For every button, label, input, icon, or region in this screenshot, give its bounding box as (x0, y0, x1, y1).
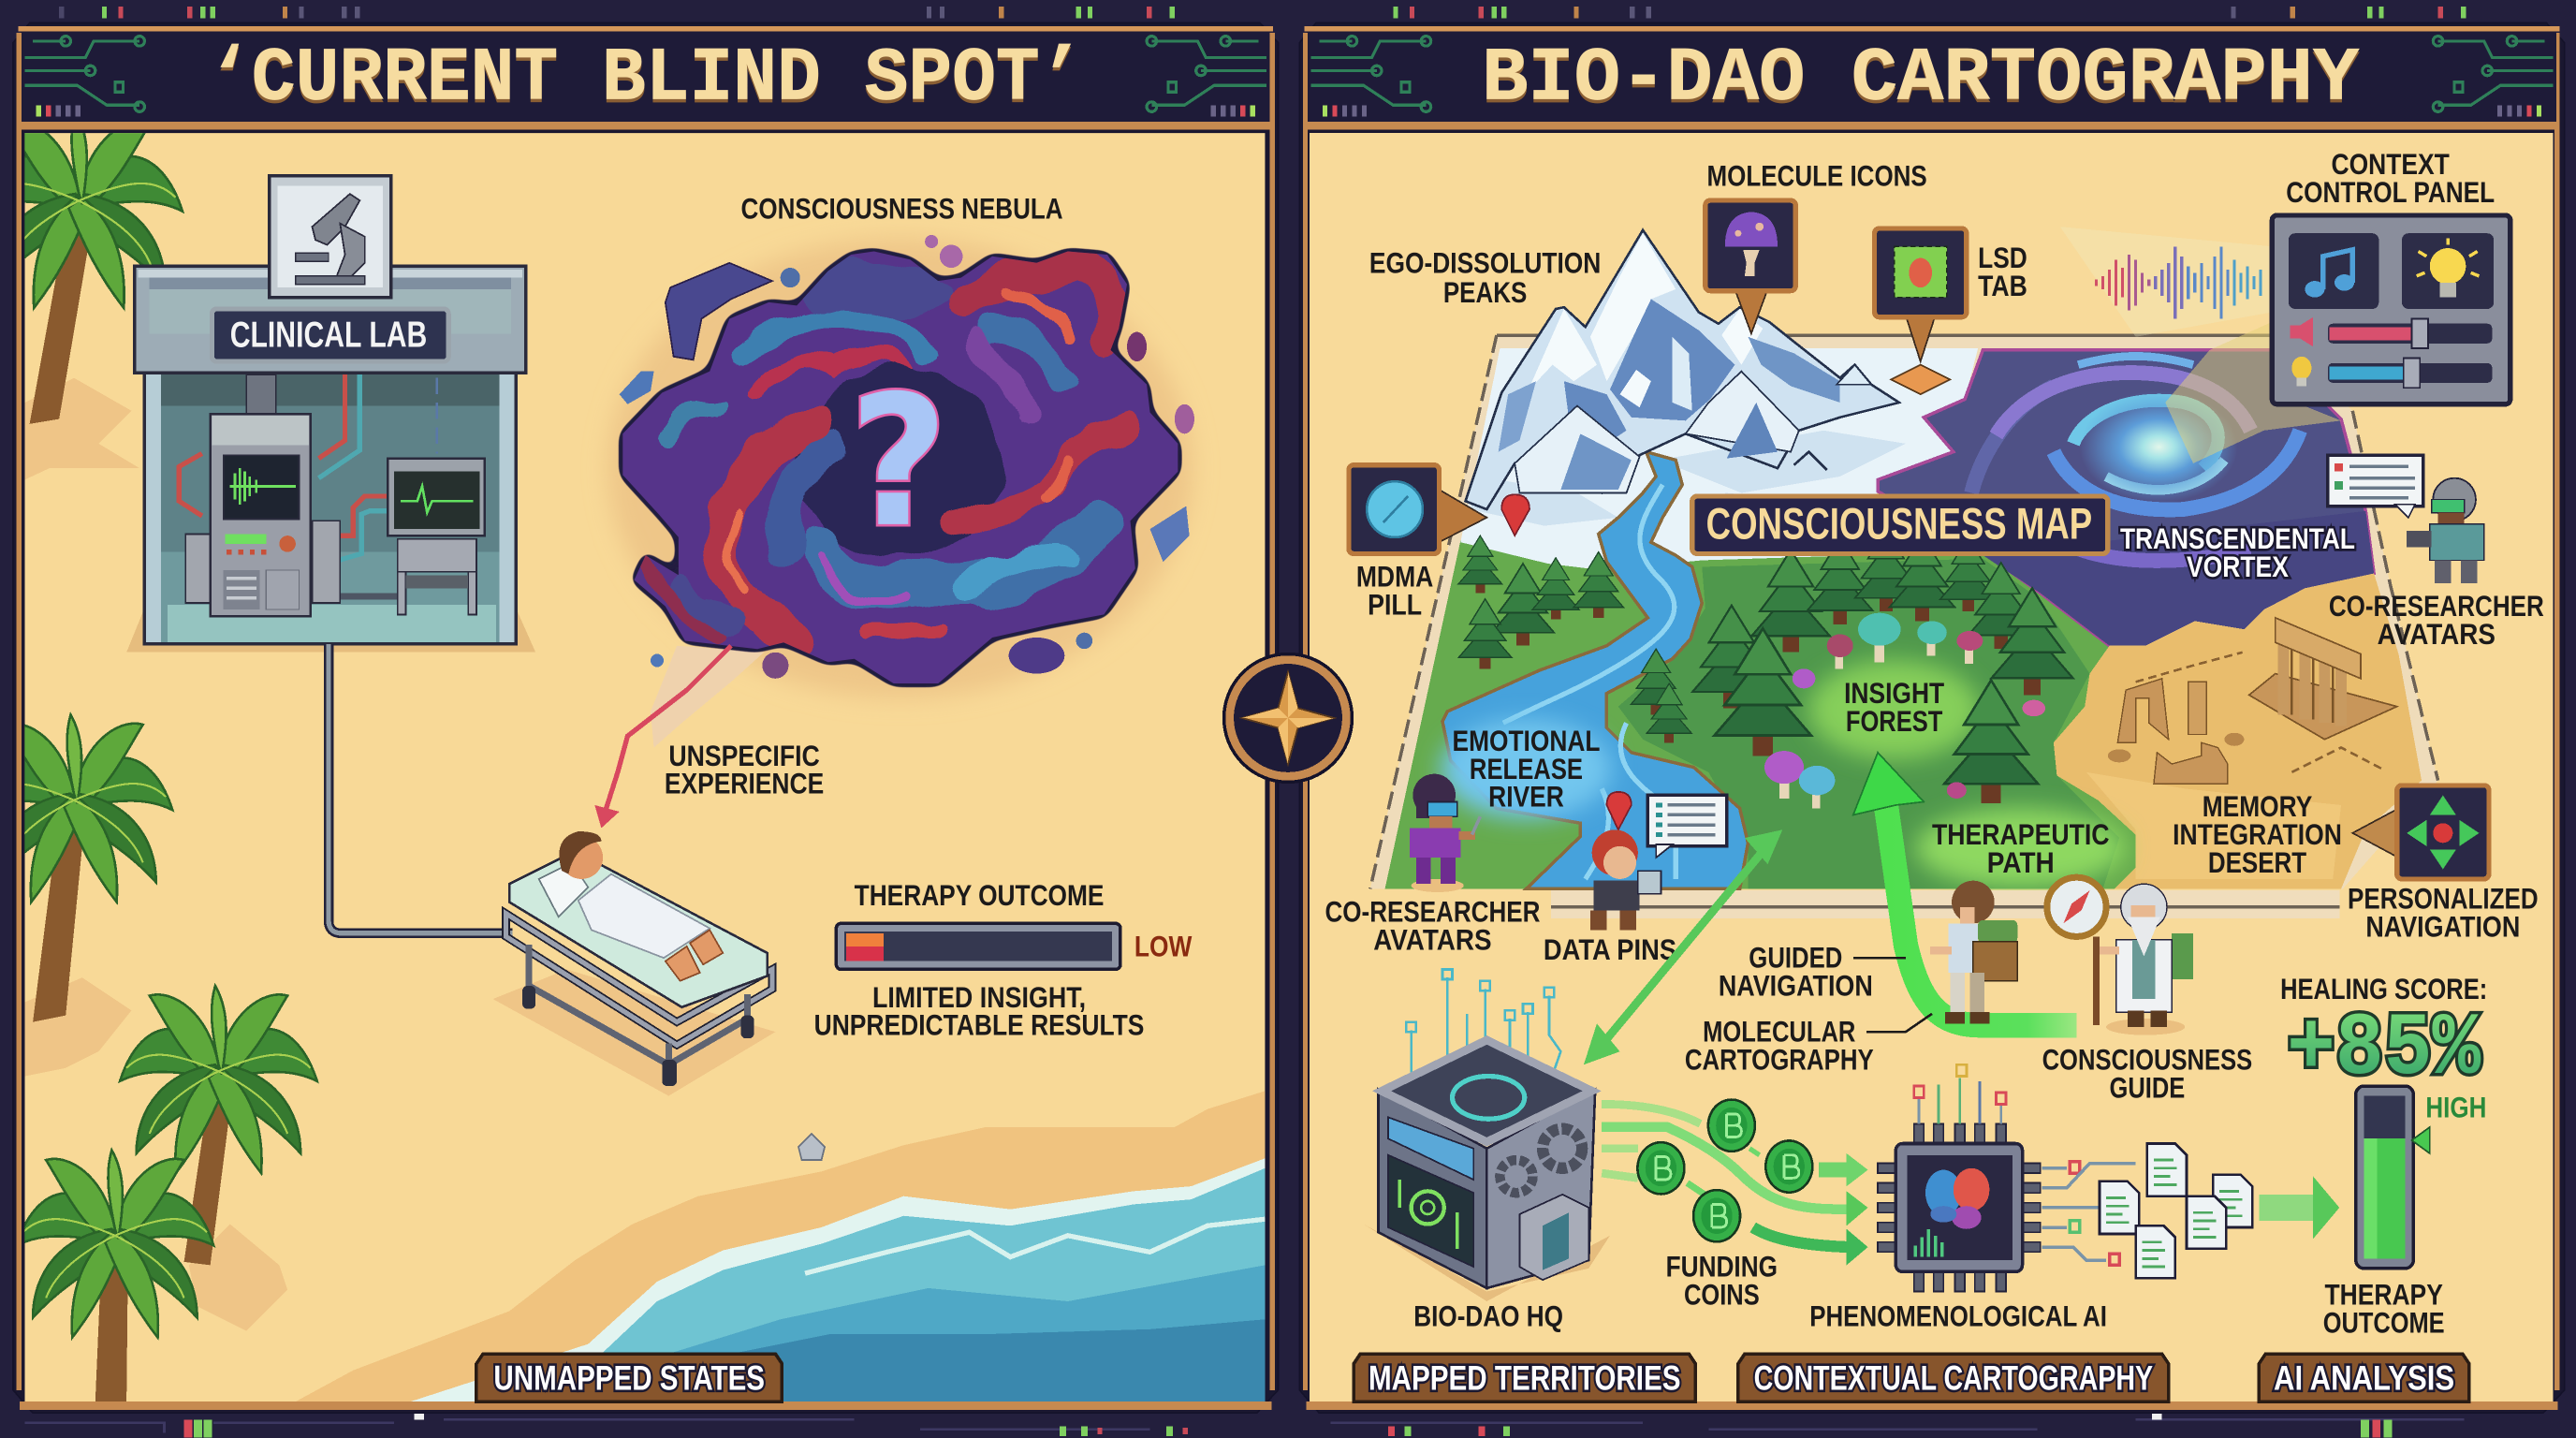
map pin (1501, 494, 1530, 536)
therapy outcome label right (2323, 1277, 2445, 1339)
co-researcher label top right: AVATARS (2378, 617, 2496, 651)
therapy outcome label: THERAPY OUTCOME (855, 878, 1104, 912)
icon: central compass (1224, 654, 1352, 782)
header bar right (1306, 31, 2558, 130)
vortex lower tone (1983, 511, 2374, 646)
funding flows (1602, 1104, 1848, 1247)
funding coins label: COINS (1684, 1277, 1760, 1311)
nebula plume (651, 646, 764, 748)
ego-dissolution label (1369, 245, 1601, 309)
river highlight (1503, 485, 1717, 879)
map top edge (1497, 334, 2272, 336)
brain (1925, 1168, 1989, 1229)
gears (1500, 1129, 1582, 1193)
emotional release river label: RIVER (1488, 780, 1564, 814)
tab: unmapped states: UNMAPPED STATES (493, 1359, 765, 1398)
therapy outcome low: UNPREDICTABLE RESULTS (814, 1008, 1144, 1042)
foam lines (805, 1219, 1265, 1273)
co-researcher label left: AVATARS (1373, 922, 1492, 956)
insight forest label (1844, 676, 1944, 738)
mdma pill label: PILL (1368, 587, 1422, 621)
lab roof (135, 266, 526, 373)
gurney frame (506, 914, 772, 1068)
sound beam (2060, 227, 2272, 337)
foam (411, 1158, 1265, 1401)
right peak (1721, 309, 1763, 365)
mushrooms (1764, 613, 2045, 808)
light button (2402, 233, 2494, 309)
lsd tab marker (1891, 365, 1950, 394)
right wall (1486, 1090, 1595, 1288)
palm 3 (120, 986, 317, 1265)
music button (2289, 233, 2378, 309)
mid peak (1686, 372, 1799, 452)
main machine (185, 414, 340, 616)
mdma pill icon (1349, 465, 1486, 553)
chip signal wires (1914, 1064, 2006, 1123)
circuit screen (1388, 1155, 1473, 1267)
tab: mapped territories (1354, 1354, 1695, 1401)
title: bio-dao cartography: BIO-DAO CARTOGRAPHY (1482, 37, 2360, 122)
chip pins (1878, 1123, 2041, 1291)
healing score label: HEALING SCORE: (2280, 972, 2487, 1005)
guided navigation label (1719, 941, 1906, 1003)
icon: mushroom molecule (1705, 200, 1795, 333)
personalized navigation label: NAVIGATION (2365, 909, 2520, 943)
lab wall upper band (161, 374, 500, 405)
consciousness map title (1692, 496, 2108, 553)
circuit decoration right of left header (1147, 37, 1266, 117)
desert (2054, 574, 2422, 888)
pillow (539, 862, 588, 917)
sound slider (2291, 317, 2492, 348)
palm shadow (24, 378, 139, 479)
speech bubble (2328, 455, 2423, 518)
molecule icons label: MOLECULE ICONS (1707, 158, 1927, 192)
gurney shadow (493, 969, 775, 1096)
unspecific experience label: UNSPECIFIC (668, 739, 820, 772)
patient on gurney (493, 831, 775, 1096)
high label: HIGH (2425, 1090, 2486, 1123)
ego-dissolution label: EGO-DISSOLUTION (1369, 245, 1601, 279)
consciousness guide label: CONSCIOUSNESS (2042, 1043, 2252, 1077)
lsd tab label (1978, 241, 2027, 302)
feet (666, 930, 723, 981)
therapy outcome high bar (2356, 1086, 2413, 1269)
side monitor (388, 459, 485, 614)
desert ruins (2108, 618, 2397, 784)
nebula swirls (622, 251, 1178, 683)
ego-dissolution label: PEAKS (1443, 275, 1527, 309)
consciousness nebula label: CONSCIOUSNESS NEBULA (741, 191, 1063, 225)
palm shadow third (189, 1224, 287, 1331)
data speech bubble (1647, 795, 1727, 858)
header bar left (20, 31, 1271, 130)
map dashed edges (1370, 335, 2438, 888)
right panel background (1310, 133, 2553, 1401)
unspecific experience arrow (594, 646, 731, 829)
icon: lsd tab (1875, 228, 1967, 361)
clinical lab sign (212, 309, 448, 361)
panel: bio-dao cartography (1299, 23, 2565, 1413)
lsd tab label: LSD (1978, 241, 2027, 274)
ai output wires (2042, 1162, 2136, 1265)
insight forest glow (1808, 661, 1980, 759)
small ridge (1794, 452, 1827, 470)
shallow water (603, 1168, 1266, 1352)
roof (1382, 1040, 1592, 1142)
sound wave (2097, 246, 2261, 318)
main peak shadow (1610, 299, 1734, 420)
lab light floor (168, 605, 496, 642)
data pin (1606, 792, 1632, 829)
clinical lab (126, 176, 535, 653)
beach scene (0, 111, 1265, 1401)
nebula halo (607, 238, 1193, 698)
memory integration desert label: MEMORY (2203, 789, 2312, 823)
lab body (144, 373, 516, 644)
insight forest label: INSIGHT (1844, 676, 1944, 710)
unspecific experience label: EXPERIENCE (665, 767, 824, 800)
mid peak shadow (1727, 403, 1778, 459)
connector pipe (329, 644, 513, 933)
co-researcher avatar left (1410, 774, 1480, 892)
wheels (522, 986, 754, 1086)
wet sand (296, 1091, 1265, 1401)
bottom circuit strip (24, 1412, 2465, 1438)
map bottom edge (1551, 890, 2339, 918)
roof hologram (1453, 1077, 1525, 1119)
circuit decoration left of right header (1311, 37, 1431, 117)
left peak snow (1528, 309, 1597, 391)
lab shadow (126, 608, 535, 653)
microscope sign (270, 176, 391, 298)
flow arrowheads (1847, 1153, 1868, 1265)
lab floor (161, 552, 500, 642)
healing score value: +85% (2287, 1000, 2481, 1100)
molecular cartography label: CARTOGRAPHY (1685, 1043, 1874, 1077)
lsd tab label: TAB (1978, 269, 2027, 302)
left peak shadow (1564, 381, 1627, 447)
machine column (246, 374, 276, 418)
emotional release river label: RELEASE (1470, 752, 1583, 785)
river (1442, 452, 1748, 888)
transcendental vortex label (2120, 521, 2355, 583)
tab: contextual cartography: CONTEXTUAL CARTOGRAPHY (1754, 1359, 2153, 1398)
low outcome bar (836, 923, 1120, 969)
guided navigation label: NAVIGATION (1719, 969, 1873, 1003)
bio-dao hq label: BIO-DAO HQ (1413, 1299, 1563, 1332)
palm shadow lower (24, 977, 131, 1077)
windows (1388, 1117, 1473, 1180)
palm 1 (24, 133, 184, 424)
snow shading (1471, 431, 1906, 529)
head (559, 831, 603, 879)
mountain silhouette (1466, 230, 1899, 509)
emotional release river label: EMOTIONAL (1453, 724, 1600, 757)
personalized navigation label: PERSONALIZED (2348, 882, 2539, 916)
molecular cartography label: MOLECULAR (1703, 1015, 1856, 1049)
context control panel label (2286, 147, 2495, 209)
guided navigation label: GUIDED (1749, 941, 1842, 975)
co-researcher label left (1325, 895, 1541, 956)
co-researcher label top right (2329, 589, 2544, 651)
mdma pill label: MDMA (1356, 560, 1433, 594)
consciousness guide character (2093, 884, 2193, 1035)
therapy outcome label right: OUTCOME (2323, 1305, 2445, 1339)
consciousness map title: CONSCIOUSNESS MAP (1706, 500, 2092, 550)
consciousness nebula (607, 235, 1194, 748)
stone (798, 1134, 825, 1160)
panel: current blind spot (0, 23, 1278, 1413)
context control panel label: CONTEXT (2331, 147, 2450, 181)
right range shadow (1748, 337, 1840, 403)
mattress (509, 851, 768, 1007)
co-researcher label left: CO-RESEARCHER (1325, 895, 1541, 929)
context control panel label: CONTROL PANEL (2286, 175, 2495, 209)
tab: mapped territories: MAPPED TERRITORIES (1368, 1359, 1680, 1398)
low label: LOW (1134, 929, 1192, 962)
nebula outline (622, 252, 1178, 683)
co-researcher with data (1590, 829, 1661, 930)
therapeutic path label: PATH (1987, 845, 2055, 879)
vortex spiral arms (1971, 356, 2300, 561)
transcendental vortex (1878, 350, 2374, 646)
funding coins label (1666, 1250, 1778, 1311)
memory integration desert label: INTEGRATION (2173, 817, 2342, 851)
lower left peak (1515, 405, 1640, 493)
forest floor (1618, 559, 2119, 888)
left wall (1379, 1090, 1486, 1288)
sand (24, 133, 1265, 1401)
desert highlight (2086, 772, 2341, 879)
co-researcher avatar top right (2328, 455, 2484, 583)
context control panel (2272, 215, 2510, 404)
emotional river glow (1441, 720, 1612, 818)
nebula satellites (620, 235, 1194, 679)
therapeutic path glow (1915, 808, 2126, 888)
main peak snow (1590, 233, 1676, 381)
map base green (1385, 540, 2137, 888)
personalized navigation label (2348, 882, 2539, 943)
phenomenological ai label: PHENOMENOLOGICAL AI (1809, 1299, 2107, 1332)
traveler character (1930, 881, 2017, 1023)
lower left peak shadow (1560, 433, 1632, 490)
question mark: ? (849, 357, 948, 567)
tab: ai analysis: AI ANALYSIS (2274, 1359, 2454, 1398)
forest trees (1458, 529, 2072, 803)
antennas (1406, 969, 1560, 1084)
arrow: bio-dao to map (1584, 829, 1782, 1064)
main peak highlight (1673, 337, 1692, 411)
tab: unmapped states (476, 1354, 782, 1401)
light slider (2291, 357, 2492, 388)
memory integration desert label (2173, 789, 2342, 879)
compass (2047, 877, 2106, 936)
building shadow (1364, 1224, 1610, 1301)
funding coins (1636, 1098, 1814, 1243)
chip bars (1915, 1229, 1942, 1257)
far left facets (1499, 381, 1536, 452)
deep water (698, 1319, 1265, 1401)
therapeutic path label: THERAPEUTIC (1932, 817, 2110, 851)
therapy outcome low (814, 878, 1192, 1042)
vortex center glow (2080, 391, 2237, 503)
tab: contextual cartography (1738, 1354, 2169, 1401)
consciousness map (1370, 230, 2438, 918)
top status strip (59, 7, 2466, 18)
molecular cartography label (1685, 1014, 1932, 1077)
high marker (2411, 1127, 2430, 1153)
transcendental vortex label: TRANSCENDENTAL (2120, 521, 2355, 555)
palm 2 (24, 712, 174, 1022)
personalized navigation icon (2352, 785, 2489, 879)
therapy outcome label right: THERAPY (2324, 1277, 2443, 1311)
entrance (1519, 1195, 1588, 1280)
context beam (2165, 320, 2341, 463)
tab: ai analysis (2259, 1354, 2469, 1401)
circuit decoration right of right header (2433, 37, 2553, 117)
palm 4 (17, 1151, 213, 1401)
funding coins label: FUNDING (1666, 1250, 1778, 1284)
transcendental vortex label: VORTEX (2187, 550, 2289, 583)
data pins label: DATA PINS (1544, 932, 1676, 966)
pipes (179, 374, 437, 596)
small summit (1837, 365, 1871, 385)
mid water (674, 1266, 1266, 1352)
panel frame left (13, 23, 1278, 1413)
title: current blind spot: ‘CURRENT BLIND SPOT’ (208, 37, 1083, 122)
outcome description: LIMITED INSIGHT, (872, 980, 1086, 1014)
analysis documents (2100, 1143, 2252, 1278)
mountains (1466, 230, 1899, 509)
therapeutic path label (1932, 817, 2110, 879)
map paper (1370, 335, 2438, 888)
insight forest label: FOREST (1846, 704, 1942, 738)
panel frame right (1299, 23, 2565, 1413)
snow region (1460, 348, 1978, 570)
memory integration desert label: DESERT (2208, 845, 2306, 879)
phenomenological ai chip (1878, 1064, 2041, 1291)
circuit decoration left header (24, 37, 144, 117)
clinical lab label: CLINICAL LAB (230, 315, 427, 355)
arrow: therapeutic path (1853, 753, 2076, 1025)
central crag snow (1620, 370, 1651, 407)
arrow: analysis to outcome (2259, 1177, 2339, 1239)
gown (578, 874, 710, 958)
bio-dao hq building (1364, 969, 1610, 1301)
lab interior wall (161, 374, 500, 552)
consciousness guide label (2042, 1043, 2252, 1104)
consciousness guide label: GUIDE (2110, 1070, 2185, 1104)
mdma pill label (1356, 560, 1433, 621)
unspecific experience label (665, 739, 824, 800)
emotional release river label (1453, 724, 1600, 814)
